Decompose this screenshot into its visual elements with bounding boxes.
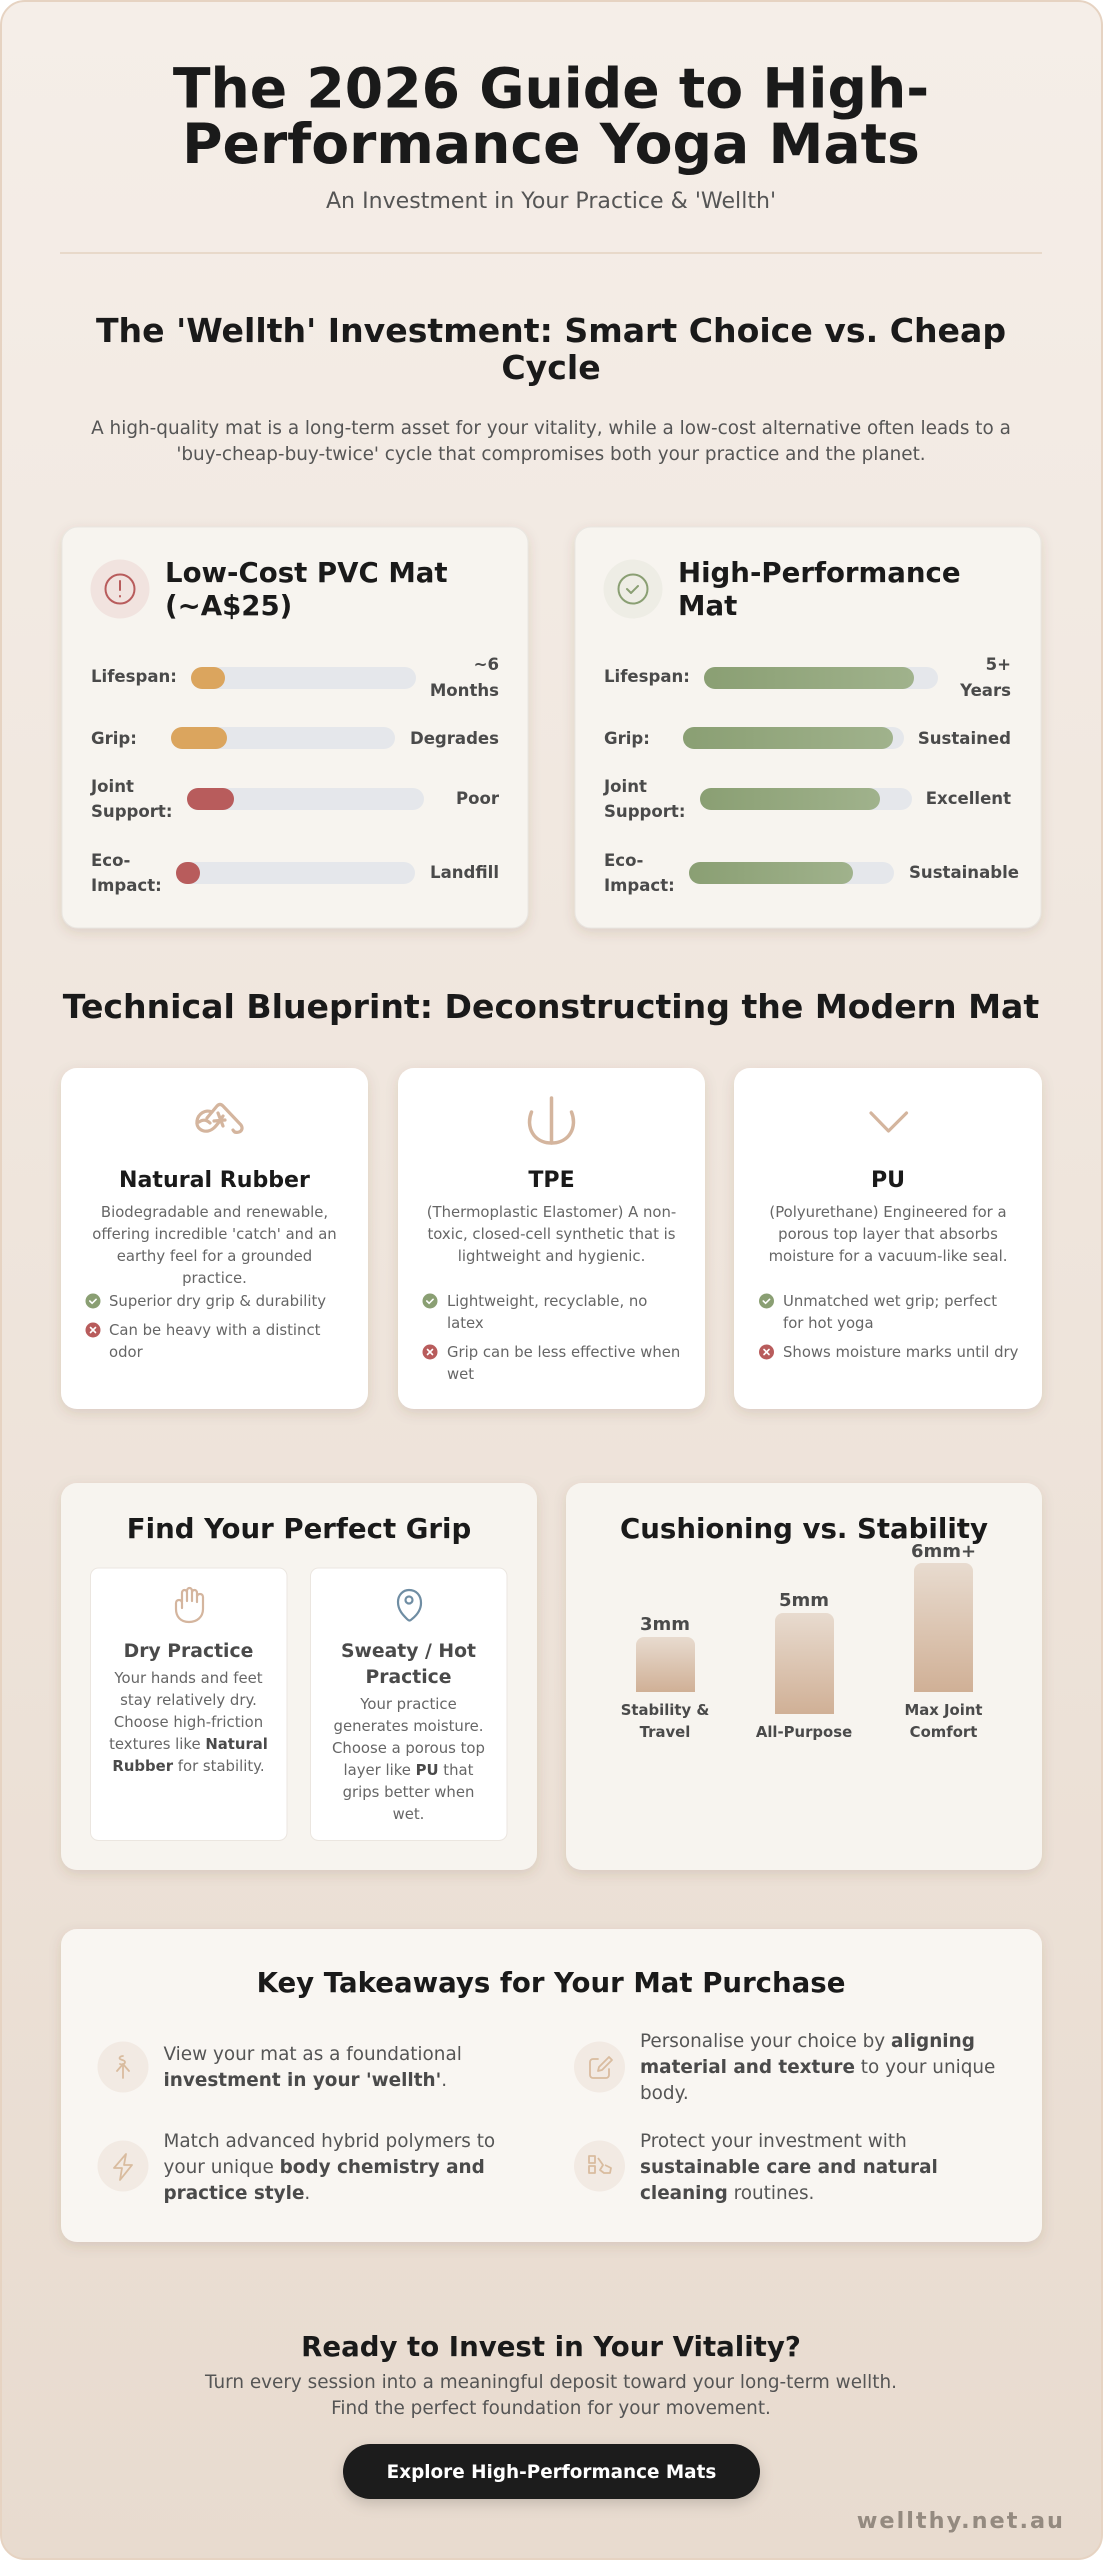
panel heading: Cushioning vs. Stability <box>620 1512 988 1545</box>
con item <box>422 1343 680 1383</box>
row: lifespan: Lifespan: <box>91 667 177 686</box>
icon: TPE <box>530 1098 573 1143</box>
row: joint support: Joint <box>90 777 134 796</box>
card heading: Low-Cost PVC Mat <box>165 556 448 589</box>
description: Biodegradable and renewable, <box>101 1203 328 1221</box>
row: lifespan: 5+ <box>986 655 1011 674</box>
bar: 6mm+: Max Joint <box>904 1701 983 1719</box>
website footer: wellthy.net.au <box>857 2508 1065 2534</box>
icon: warning <box>90 560 150 618</box>
takeaway: personalise: Personalise your choice by aligning <box>640 2031 975 2052</box>
description <box>332 1695 485 1823</box>
section heading: wellth investment <box>96 311 1006 387</box>
pro item: Superior dry grip & durability <box>109 1292 326 1310</box>
con item: Shows moisture marks until dry <box>783 1343 1019 1361</box>
card heading: High-Performance <box>678 556 961 589</box>
panel: cushioning vs stability <box>566 1483 1042 1870</box>
description: generates moisture. <box>334 1717 483 1735</box>
con item: Can be heavy with a distinct <box>109 1321 321 1339</box>
takeaway: match: Match advanced hybrid polymers to <box>164 2131 495 2152</box>
card title: PU <box>871 1168 905 1193</box>
row: joint support: Joint <box>603 777 647 796</box>
panel: PU <box>734 1068 1042 1409</box>
takeaway: personalise: body. <box>640 2083 689 2104</box>
takeaway: match: practice style. <box>164 2183 310 2204</box>
takeaway: personalise <box>574 2031 995 2104</box>
row: joint support: Support: <box>604 802 685 821</box>
description: offering incredible 'catch' and an <box>92 1225 337 1243</box>
card title: TPE <box>528 1168 575 1193</box>
description: Choose a porous top <box>332 1739 485 1757</box>
description: grips better when <box>343 1783 474 1801</box>
row: lifespan <box>91 655 499 700</box>
pro item <box>422 1292 647 1332</box>
description <box>427 1203 676 1265</box>
row: grip <box>91 727 499 749</box>
bar: 5mm: All-Purpose <box>756 1723 852 1741</box>
takeaway: protect: cleaning routines. <box>640 2183 814 2204</box>
takeaway: investment: investment in your 'wellth'. <box>164 2070 447 2091</box>
title: The 2026 Guide to High- <box>173 58 929 122</box>
description: (Polyurethane) Engineered for a <box>769 1203 1007 1221</box>
intro paragraph: A high-quality mat is a long-term asset for your vitality, while a low-cost alternative often leads to a <box>91 418 1011 439</box>
con item: Grip can be less effective when <box>447 1343 680 1361</box>
card title: Practice <box>365 1667 452 1688</box>
bar: 6mm+ <box>904 1541 983 1741</box>
card title: Natural Rubber <box>119 1168 310 1193</box>
row: joint support <box>603 777 1011 821</box>
takeaway: investment: View your mat as a foundational <box>164 2044 462 2065</box>
row: lifespan: ~6 <box>474 655 499 674</box>
row: joint support: Excellent <box>926 789 1011 808</box>
row: grip: Degrades <box>410 729 499 748</box>
section heading: technical blueprint: Technical Blueprint: Deconstructing the Modern Mat <box>63 987 1039 1026</box>
icon: rubber <box>197 1104 242 1132</box>
pro item: Unmatched wet grip; perfect <box>783 1292 997 1310</box>
card heading: (~A$25) <box>165 589 292 622</box>
description: layer like PU that <box>344 1761 474 1779</box>
card heading: Mat <box>678 589 737 622</box>
title: Performance Yoga Mats <box>182 113 920 177</box>
button <box>343 2444 760 2499</box>
intro paragraph: 'buy-cheap-buy-twice' cycle that compromises both your practice and the planet. <box>176 444 926 465</box>
description: stay relatively dry. <box>120 1691 257 1709</box>
row: eco-impact <box>91 851 499 895</box>
description <box>92 1203 337 1287</box>
bar: 6mm+: 6mm+ <box>911 1541 976 1562</box>
icon: check <box>604 560 662 618</box>
description: lightweight and hygienic. <box>458 1247 645 1265</box>
card title <box>341 1641 476 1688</box>
panel: key takeaways <box>61 1929 1042 2242</box>
description: toxic, closed-cell synthetic that is <box>427 1225 676 1243</box>
con item: wet <box>447 1365 474 1383</box>
row: joint support: Support: <box>91 802 172 821</box>
panel: find your perfect grip <box>61 1483 537 1870</box>
takeaway: personalise: material and texture to your unique <box>640 2057 995 2078</box>
call to action text <box>204 2372 897 2419</box>
takeaway: match <box>98 2131 495 2204</box>
description: Choose high-friction <box>114 1713 263 1731</box>
takeaway: protect: Protect your investment with <box>640 2131 907 2152</box>
icon: hand <box>176 1588 203 1622</box>
row: eco-impact: Landfill <box>430 863 499 882</box>
call to action heading: Ready to Invest in Your Vitality? <box>301 2330 801 2363</box>
icon: chevron <box>871 1113 906 1131</box>
bar: 5mm: 5mm <box>779 1590 829 1611</box>
row: lifespan <box>604 655 1011 700</box>
call to action text: Find the perfect foundation for your movement. <box>331 2398 771 2419</box>
call to action text: Turn every session into a meaningful deposit toward your long-term wellth. <box>204 2372 897 2393</box>
bar: 3mm <box>621 1614 709 1741</box>
panel: TPE <box>398 1068 705 1409</box>
pro item <box>759 1292 997 1332</box>
description: earthy feel for a grounded <box>117 1247 312 1265</box>
row: grip <box>604 727 1011 749</box>
bar: 5mm <box>756 1590 852 1741</box>
description <box>109 1669 268 1775</box>
row: eco-impact <box>604 851 1019 895</box>
bar: 3mm: Stability & <box>621 1701 709 1719</box>
bar: 3mm: 3mm <box>640 1614 690 1635</box>
description: (Thermoplastic Elastomer) A non- <box>427 1203 676 1221</box>
description: textures like Natural <box>109 1735 268 1753</box>
row: joint support <box>90 777 500 821</box>
row: eco-impact: Eco- <box>91 851 130 870</box>
row: lifespan: Lifespan: <box>604 667 690 686</box>
card heading <box>165 556 448 622</box>
row: eco-impact: Impact: <box>91 876 162 895</box>
card title: Sweaty / Hot <box>341 1641 476 1662</box>
section heading: wellth investment: The 'Wellth' Investment: Smart Choice vs. Cheap <box>96 311 1006 350</box>
row: grip: Grip: <box>91 729 137 748</box>
panel: low-cost PVC mat <box>62 527 528 928</box>
card: dry practice <box>90 1568 287 1840</box>
row: lifespan: Months <box>430 681 499 700</box>
description: porous top layer that absorbs <box>778 1225 998 1243</box>
pro item: for hot yoga <box>783 1314 874 1332</box>
title <box>173 58 929 177</box>
pro item: Lightweight, recyclable, no <box>447 1292 647 1310</box>
con item <box>86 1321 321 1361</box>
row: joint support: Poor <box>456 789 500 808</box>
panel heading: Find Your Perfect Grip <box>127 1512 471 1545</box>
panel: natural rubber <box>61 1068 368 1409</box>
takeaway: protect <box>574 2131 938 2204</box>
takeaway: match: your unique body chemistry and <box>164 2157 485 2178</box>
subtitle: An Investment in Your Practice & 'Wellth' <box>326 189 776 214</box>
row: lifespan: Years <box>959 681 1011 700</box>
card heading <box>678 556 961 622</box>
description: Your practice <box>359 1695 457 1713</box>
intro paragraph <box>91 418 1011 465</box>
description <box>769 1203 1007 1265</box>
bar: 3mm: Travel <box>640 1723 690 1741</box>
card title: Dry Practice <box>124 1641 253 1662</box>
description: Rubber for stability. <box>112 1757 265 1775</box>
pro item: latex <box>447 1314 484 1332</box>
takeaway: protect: sustainable care and natural <box>640 2157 938 2178</box>
panel: high-performance mat <box>575 527 1041 928</box>
con item: odor <box>109 1343 144 1361</box>
row: grip: Sustained <box>918 729 1011 748</box>
section heading: wellth investment: Cycle <box>501 348 601 387</box>
row: eco-impact: Impact: <box>604 876 675 895</box>
icon: drop <box>398 1590 421 1620</box>
takeaway: investment <box>98 2042 462 2092</box>
button: Explore High-Performance Mats <box>387 2462 716 2483</box>
card: sweaty practice <box>310 1568 507 1840</box>
description: moisture for a vacuum-like seal. <box>769 1247 1007 1265</box>
panel heading: Key Takeaways for Your Mat Purchase <box>257 1966 845 1999</box>
description: practice. <box>182 1269 247 1287</box>
description: Your hands and feet <box>113 1669 263 1687</box>
description: wet. <box>393 1805 424 1823</box>
row: grip: Grip: <box>604 729 650 748</box>
row: eco-impact: Sustainable <box>909 863 1019 882</box>
bar: 6mm+: Comfort <box>910 1723 977 1741</box>
row: eco-impact: Eco- <box>604 851 643 870</box>
